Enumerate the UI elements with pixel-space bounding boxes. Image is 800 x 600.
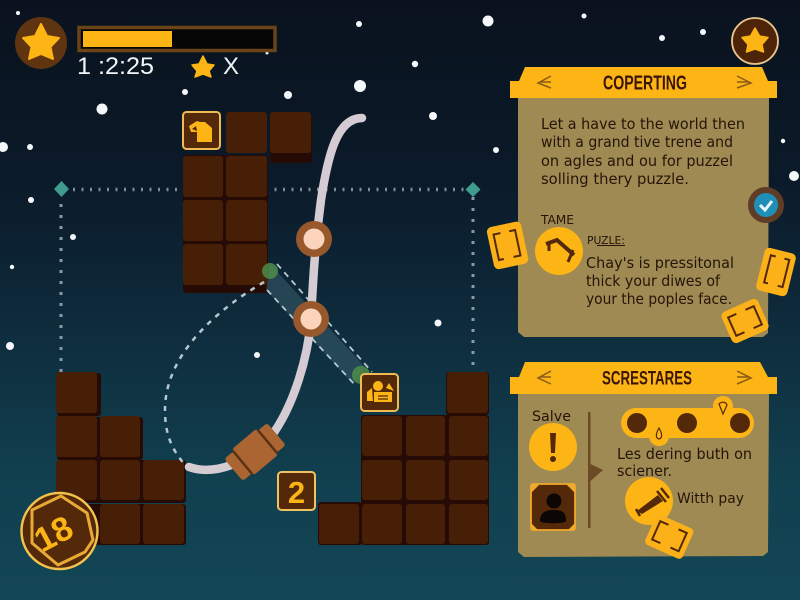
icon: tool circle <box>535 227 583 275</box>
translucent track <box>262 263 372 386</box>
body text: with a grand tive trene and <box>541 133 733 151</box>
blocks: top group <box>183 112 312 293</box>
icon tile: tools <box>361 374 398 411</box>
body text: solling thery puzzle. <box>541 170 689 188</box>
pill with three dots <box>621 396 754 446</box>
top right star badge <box>732 18 778 64</box>
card right <box>755 247 797 297</box>
number tile 2 <box>278 472 315 510</box>
heading: SCRESTARES <box>602 368 692 390</box>
icon: alert circle <box>529 423 577 471</box>
description text: sciener. <box>617 462 672 480</box>
panel header ribbon <box>510 67 777 98</box>
dashed arc <box>165 282 264 466</box>
hud: progress bar <box>79 28 275 50</box>
card left <box>486 221 529 270</box>
blocks: bottom left group <box>56 372 186 545</box>
hud: star counter <box>192 53 239 80</box>
heading: COPERTING <box>603 72 687 94</box>
description text: Chay's is pressitonal <box>586 254 734 272</box>
description text: thick your diwes of <box>586 272 721 290</box>
level badge 18: 18 <box>28 509 79 560</box>
card bottom <box>720 297 770 345</box>
body text: on agles and ou for puzzel <box>541 152 733 170</box>
stars background <box>0 11 799 358</box>
check badge <box>751 190 781 220</box>
body text: Let a have to the world then <box>541 115 745 133</box>
panel: coperting <box>510 67 777 337</box>
card <box>644 513 695 560</box>
rope node upper <box>296 221 332 257</box>
description text: Les dering buth on <box>617 445 752 463</box>
description text: your the poples face. <box>586 290 732 308</box>
level badge 18 <box>22 493 98 569</box>
label puzle: PUZLE: <box>587 235 625 247</box>
panel: screstares <box>510 362 777 560</box>
hud: star counter: X <box>223 53 239 80</box>
label tame: TAME <box>540 213 574 227</box>
dotted play area <box>54 181 480 372</box>
body text <box>541 115 745 188</box>
hud: timer: 1 :2:25 <box>77 53 154 80</box>
number tile 2: 2 <box>288 475 305 510</box>
panel body <box>518 392 769 557</box>
icon tile: house <box>183 112 220 149</box>
header arrows <box>538 371 751 384</box>
description text <box>617 445 752 480</box>
rope <box>189 118 362 470</box>
rope clamp <box>223 421 287 483</box>
header arrows <box>538 76 751 88</box>
blocks: bottom right group <box>318 372 489 545</box>
description text <box>586 254 734 308</box>
icon: person tile <box>531 484 575 530</box>
label salve: Salve <box>532 409 571 425</box>
icon: telescope circle <box>625 477 673 525</box>
label with pay: Witth pay <box>677 491 744 507</box>
rope node lower <box>293 301 329 337</box>
panel header ribbon <box>510 362 777 394</box>
panel body <box>518 96 769 337</box>
hud: star badge <box>15 17 67 69</box>
divider arrow <box>588 412 603 528</box>
